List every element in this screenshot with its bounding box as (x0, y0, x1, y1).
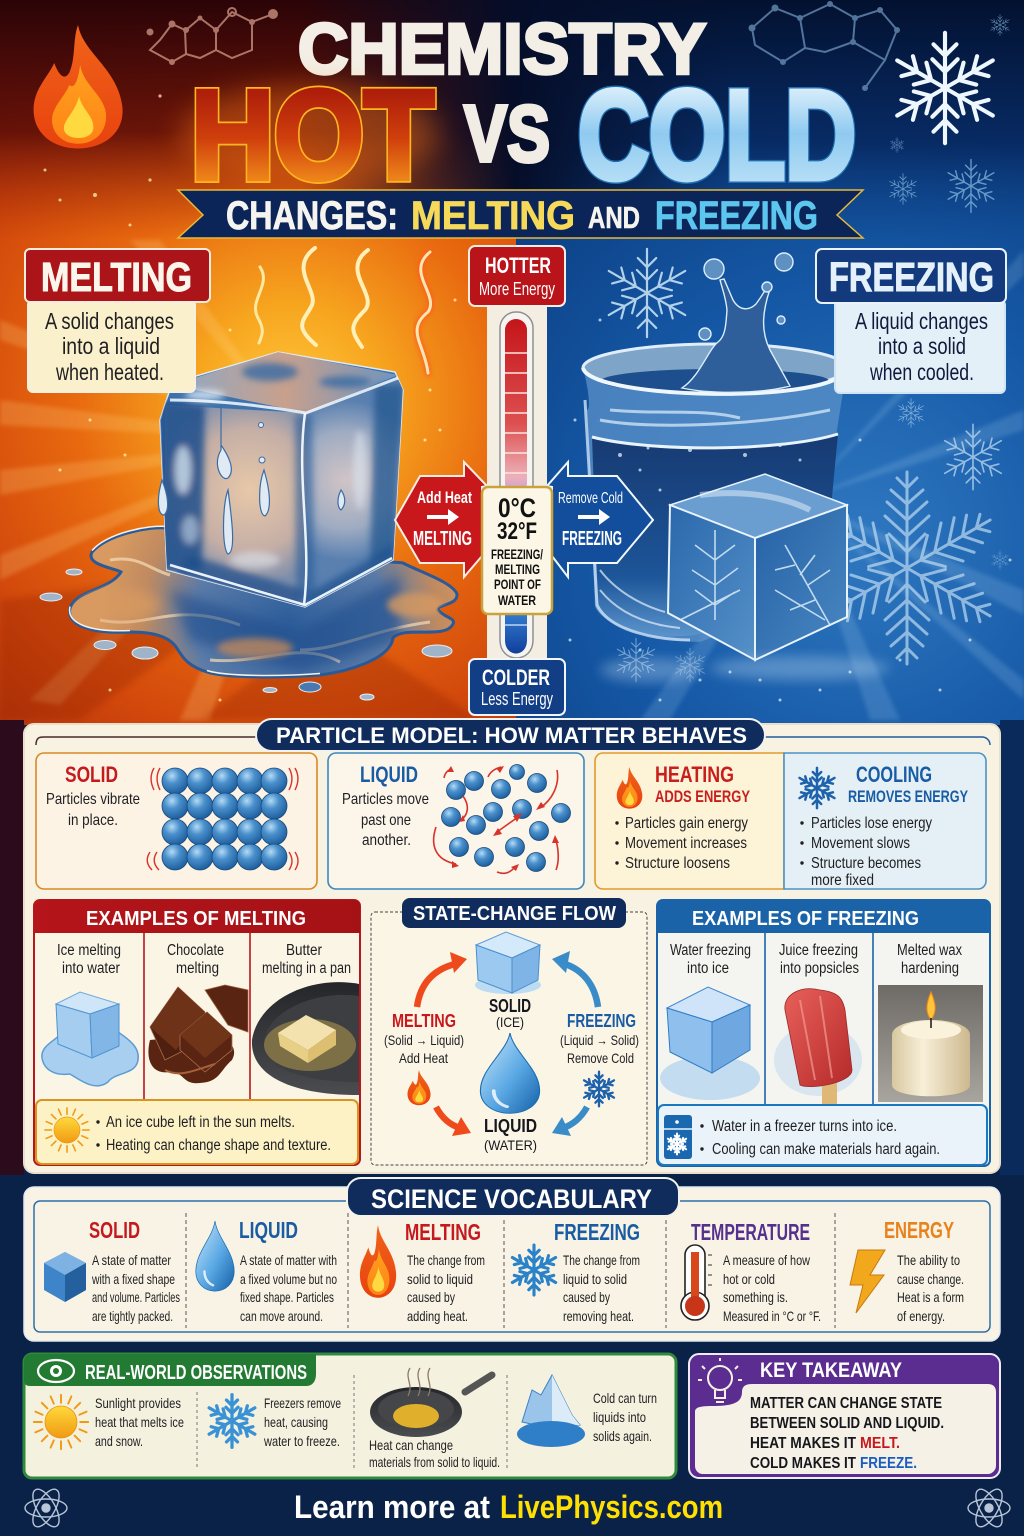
freezing examples note: Water in a freezer turns into ice. (712, 1118, 897, 1135)
vocab: melting (360, 1219, 485, 1324)
card: heating and cooling: REMOVES ENERGY (848, 787, 968, 806)
image: butter in pan (252, 982, 359, 1095)
freezing point box (482, 487, 552, 614)
card: heating and cooling: COOLING (856, 762, 932, 787)
label: melting: A solid changes (45, 308, 174, 334)
vocab: energy: ENERGY (884, 1217, 954, 1243)
vocab: liquid: LIQUID (239, 1217, 298, 1243)
card: liquid: LIQUID (360, 762, 418, 787)
vocab: freezing: removing heat. (563, 1308, 634, 1324)
vocab: temperature: Measured in °C or °F. (723, 1308, 821, 1324)
vocab: temperature: something is. (723, 1289, 788, 1305)
thermometer label: colder: Less Energy (481, 689, 553, 709)
card: heating and cooling: Movement increases (625, 835, 747, 852)
image: melting chocolate (148, 985, 248, 1083)
panel: real-world observations (24, 1354, 676, 1478)
vocab: solid: and volume. Particles (92, 1289, 180, 1305)
arrow: add heat melting: Add Heat (417, 488, 472, 507)
panel: examples of melting: EXAMPLES OF MELTING (86, 908, 306, 930)
arrow: remove cold freezing: FREEZING (562, 528, 622, 550)
arrow: remove cold freezing: Remove Cold (558, 490, 623, 507)
image: freezing ice block (660, 987, 760, 1100)
arrow: melting down (436, 1107, 471, 1136)
arrow: melting up (417, 952, 467, 1007)
thermometer label: hotter: More Energy (479, 279, 555, 299)
panel: key takeaway: COLD MAKES IT (750, 1455, 856, 1472)
vocab: temperature: TEMPERATURE (691, 1219, 810, 1245)
card: heating and cooling: Structure loosens (625, 855, 730, 872)
title: hot vs cold: HOT (191, 64, 434, 206)
melting examples note: An ice cube left in the sun melts. (106, 1114, 295, 1131)
flow heading (402, 898, 626, 928)
thermometer label: hotter (469, 246, 565, 306)
freezing point box: FREEZING/ (491, 546, 543, 562)
freezing point box: WATER (498, 592, 536, 608)
liquid motion arrows (434, 767, 558, 873)
icon: cooling snowflake (797, 768, 837, 808)
thermometer label: hotter: HOTTER (485, 253, 551, 278)
panel: key takeaway: BETWEEN SOLID AND LIQUID. (750, 1415, 944, 1432)
panel: main lower (24, 724, 1000, 1173)
molecule right (748, 1, 900, 91)
observation: pan: Heat can change (369, 1437, 453, 1453)
panel: key takeaway: FREEZE. (860, 1455, 917, 1472)
card: solid: SOLID (65, 762, 118, 787)
observation: pan: materials from solid to liquid. (369, 1454, 500, 1470)
freezing label: Remove Cold (567, 1050, 634, 1066)
card: solid: in place. (68, 812, 118, 829)
arrow: remove cold freezing (547, 462, 653, 577)
panel: key takeaway (689, 1354, 1000, 1478)
freezing examples note (658, 1105, 987, 1165)
subtitle ribbon: MELTING (411, 194, 575, 238)
image: melting ice cube (42, 992, 138, 1086)
vocab: liquid: A state of matter with (240, 1252, 337, 1268)
icon: atom left (25, 1485, 67, 1531)
vocab: energy: Heat is a form (897, 1289, 964, 1305)
panel: examples of melting: Chocolate (167, 942, 224, 959)
melting label: (Solid → Liquid) (384, 1032, 464, 1048)
vocab: energy: The ability to (897, 1252, 960, 1268)
label: freezing (816, 249, 1006, 393)
icon: lightbulb (698, 1358, 742, 1402)
panel: key takeaway: HEAT MAKES IT (750, 1435, 856, 1452)
vocab: energy: of energy. (897, 1308, 945, 1324)
panel: key takeaway: MATTER CAN CHANGE STATE (750, 1395, 942, 1412)
panel: state change flow: (ICE) (496, 1014, 524, 1030)
image: popsicle (774, 989, 862, 1104)
subtitle ribbon: CHANGES: (226, 194, 398, 238)
panel: state change flow: LIQUID (484, 1116, 537, 1136)
panel: examples of melting (34, 900, 360, 1165)
panel: examples of melting: melting (176, 960, 219, 977)
title: hot vs cold: COLD (578, 64, 856, 206)
vocab: solid (44, 1217, 180, 1324)
vocab: solid: with a fixed shape (91, 1271, 175, 1287)
mottling (160, 363, 403, 610)
title: hot vs cold: VS (464, 89, 550, 178)
observation: sunlight (34, 1395, 184, 1449)
observation: pan (369, 1368, 500, 1470)
card: liquid: another. (362, 832, 411, 849)
observation: sunlight: heat that melts ice (95, 1414, 184, 1430)
arrow: freezing down (552, 1107, 587, 1136)
observation: iceberg: liquids into (593, 1409, 646, 1425)
panel: examples of freezing: EXAMPLES OF FREEZING (692, 908, 919, 930)
vocab: melting: MELTING (405, 1219, 481, 1245)
label: freezing: into a solid (878, 333, 966, 359)
image: candle (878, 985, 983, 1102)
card: heating and cooling: HEATING (655, 762, 734, 787)
small snowflakes top right (888, 14, 1010, 212)
panel: real-world observations: REAL-WORLD OBSERVATIONS (85, 1362, 307, 1384)
observation: sunlight: Sunlight provides (95, 1395, 181, 1411)
vocab: temperature (681, 1219, 821, 1324)
melting examples note: Heating can change shape and texture. (106, 1137, 331, 1154)
panel: examples of melting: melting in a pan (262, 960, 351, 977)
vocab: melting: solid to liquid (407, 1271, 473, 1287)
subtitle ribbon (178, 190, 863, 238)
title: hot vs cold: HOT (191, 64, 434, 206)
arrow: add heat melting: MELTING (413, 528, 472, 550)
melting label (384, 1011, 464, 1066)
heading: particle model: PARTICLE MODEL: HOW MATTER BEHAVES (276, 723, 747, 748)
icon: small flame (407, 1070, 431, 1105)
vocab: solid: are tightly packed. (92, 1308, 173, 1324)
vocab: liquid: a fixed volume but no (240, 1271, 337, 1287)
melting puddle (40, 526, 457, 700)
liquid particles (442, 764, 570, 872)
card: heating and cooling: Structure becomes (811, 855, 921, 872)
panel: state change flow: (WATER) (484, 1137, 537, 1153)
label: melting (25, 249, 210, 392)
molecule left (146, 8, 278, 65)
label: melting: when heated. (55, 359, 164, 385)
card: solid (36, 753, 317, 889)
observation: freezer: Freezers remove (264, 1395, 341, 1411)
icon: sun (45, 1108, 89, 1152)
icon: eye (38, 1360, 74, 1382)
observation: sunlight: and snow. (95, 1433, 143, 1449)
card: heating and cooling: ADDS ENERGY (655, 787, 751, 806)
melting ice cube (158, 352, 403, 610)
label: freezing: when cooled. (869, 359, 974, 385)
arrow: add heat melting (395, 462, 487, 577)
vocab: melting: The change from (407, 1252, 485, 1268)
melting label: MELTING (392, 1011, 456, 1031)
icon: freezer (664, 1115, 692, 1159)
flow heading: STATE-CHANGE FLOW (413, 903, 616, 925)
frozen ice cube (668, 474, 847, 660)
heat waves (255, 248, 431, 373)
thermometer label: colder (469, 659, 565, 715)
card: liquid (328, 753, 584, 889)
title: chemistry: CHEMISTRY (298, 10, 706, 90)
observation: iceberg (517, 1375, 657, 1447)
melting examples note (36, 1100, 358, 1164)
panel: state change flow: SOLID (489, 996, 531, 1016)
vocab: liquid (196, 1217, 337, 1324)
freezing point box: 0°C (498, 493, 536, 523)
subtitle ribbon: AND (588, 200, 640, 235)
arrow: freezing up (552, 951, 598, 1007)
snowflakes right (604, 249, 1009, 682)
title: hot vs cold: COLD (578, 64, 856, 206)
icon: flame top left (34, 25, 123, 148)
vocab: temperature: A measure of how (723, 1252, 811, 1268)
panel: examples of freezing: into popsicles (780, 960, 859, 977)
vocab: energy: cause change. (897, 1271, 964, 1287)
vocab: liquid: fixed shape. Particles (240, 1289, 334, 1305)
panel: examples of freezing: Melted wax (897, 942, 962, 959)
freezing point box: POINT OF (494, 576, 541, 592)
icon: snowflake top right (891, 33, 999, 143)
observation: iceberg: Cold can turn (593, 1390, 657, 1406)
card: heating and cooling (595, 753, 986, 889)
label: melting: MELTING (41, 254, 192, 300)
panel: key takeaway: KEY TAKEAWAY (760, 1359, 902, 1382)
footer: Learn more at (294, 1489, 490, 1525)
freezing label (560, 1011, 639, 1066)
panel: key takeaway: MELT. (860, 1435, 900, 1452)
panel: examples of melting: into water (62, 960, 120, 977)
observation: freezer: heat, causing (264, 1414, 328, 1430)
vocab: solid: A state of matter (92, 1252, 171, 1268)
card: liquid: past one (361, 812, 411, 829)
freezing label: FREEZING (567, 1011, 636, 1031)
card: heating and cooling: Particles gain energy (625, 815, 748, 832)
vocab: energy (850, 1217, 964, 1324)
title: hot vs cold (180, 64, 856, 206)
label: melting: into a liquid (62, 333, 160, 359)
vocab: melting: caused by (407, 1289, 455, 1305)
freezing point box: 32°F (497, 518, 537, 545)
label: freezing: A liquid changes (855, 308, 988, 334)
vocab: freezing: liquid to solid (563, 1271, 627, 1287)
panel: examples of freezing: Juice freezing (779, 942, 858, 959)
freezing label: (Liquid → Solid) (560, 1032, 639, 1048)
water splash (682, 253, 793, 392)
card: heating and cooling: Particles lose energy (811, 815, 932, 832)
icon: small snowflake (582, 1072, 616, 1106)
vocab: liquid: can move around. (240, 1308, 323, 1324)
observation: freezer: water to freeze. (263, 1433, 340, 1449)
thermometer label: colder: COLDER (482, 665, 550, 690)
observation: freezer (206, 1395, 341, 1449)
icon: heating flame (617, 767, 642, 809)
panel: examples of freezing: into ice (687, 960, 729, 977)
card: heating and cooling: more fixed (811, 872, 874, 889)
solid particle lattice (162, 768, 287, 870)
panel: examples of freezing (657, 900, 990, 1166)
vocab: freezing: caused by (563, 1289, 610, 1305)
icon: water drop liquid (480, 1033, 540, 1113)
frost at base (600, 656, 890, 682)
vocab: temperature: hot or cold (723, 1271, 775, 1287)
card: solid: Particles vibrate (46, 791, 140, 808)
footer: LivePhysics.com (500, 1489, 723, 1525)
footer (294, 1489, 723, 1525)
melting label: Add Heat (399, 1050, 448, 1066)
panel: examples of melting: Ice melting (57, 942, 121, 959)
panel: examples of freezing: hardening (901, 960, 959, 977)
vocab: melting: adding heat. (407, 1308, 468, 1324)
card: heating and cooling: Movement slows (811, 835, 910, 852)
vocab: freezing: The change from (563, 1252, 640, 1268)
vocab: freezing (510, 1219, 640, 1324)
freezing examples note: Cooling can make materials hard again. (712, 1141, 940, 1158)
panel: science vocabulary (24, 1178, 1000, 1341)
glass of water (583, 344, 847, 642)
thermometer (487, 300, 547, 665)
freezing point box: MELTING (495, 561, 540, 577)
observation: iceberg: solids again. (593, 1428, 652, 1444)
icon: atom right (968, 1485, 1010, 1531)
heading: science vocabulary: SCIENCE VOCABULARY (371, 1184, 652, 1214)
panel: examples of melting: Butter (286, 942, 322, 959)
panel: state change flow (371, 898, 647, 1165)
vocab: freezing: FREEZING (554, 1219, 640, 1245)
subtitle ribbon: FREEZING (655, 194, 818, 238)
vocab: solid: SOLID (89, 1217, 140, 1243)
panel: examples of freezing: Water freezing (670, 942, 751, 959)
card: liquid: Particles move (342, 791, 429, 808)
icon: ice cube solid (475, 932, 541, 994)
